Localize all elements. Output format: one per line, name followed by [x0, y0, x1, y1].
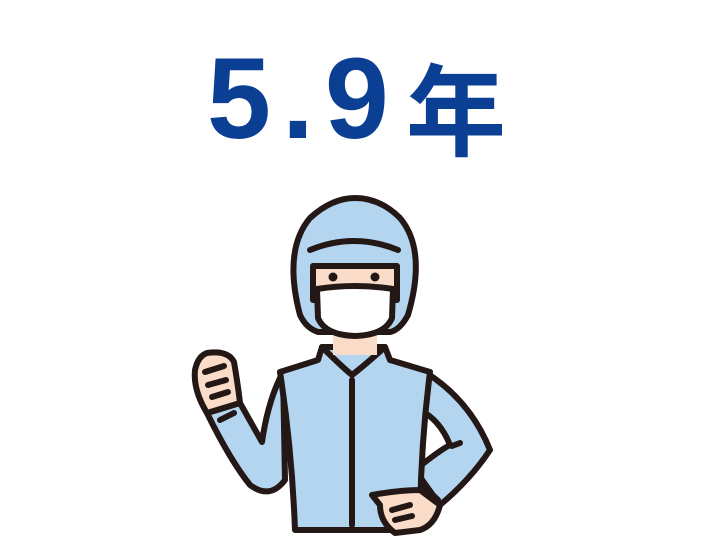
hood	[293, 198, 416, 336]
neck	[333, 330, 377, 355]
title: 5.9年: 年	[406, 32, 506, 177]
left arm with fist	[195, 352, 285, 491]
title: 5.9年	[207, 32, 506, 177]
torso	[280, 347, 430, 530]
title: 5.9年: 5.9	[207, 35, 400, 163]
right arm on hip	[415, 372, 490, 505]
right hand on hip	[372, 490, 440, 533]
